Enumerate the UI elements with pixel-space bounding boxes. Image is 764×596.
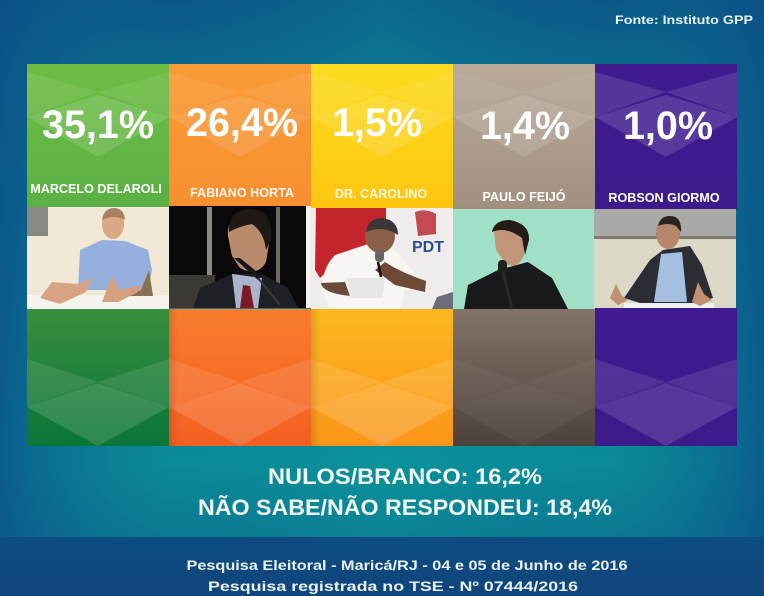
candidate name: DR. CAROLINO [335,187,427,201]
photo: Dr. Carolino [311,208,453,309]
photo: Dr. Carolino: PDT [412,239,444,256]
percentage: 1,5%: 1,5% [332,101,422,145]
panel: Paulo Feijó [453,64,595,446]
footer band [0,537,764,596]
candidate name: MARCELO DELAROLI [30,182,162,196]
percentage: 35,1%: 35,1% [42,103,154,147]
percentage: 26,4%: 26,4% [186,101,298,145]
summary: null and undecided votes: NULOS/BRANCO: 16,2% [268,464,542,489]
photo: Robson Giormo [594,209,736,308]
summary: null and undecided votes: NÃO SABE/NÃO RESPONDEU: 18,4% [198,495,612,520]
photo: Paulo Feijó [453,209,595,309]
candidate name: PAULO FEIJÓ [482,189,566,204]
percentage: 1,4%: 1,4% [480,104,570,148]
footer band: Pesquisa registrada no TSE - Nº 07444/2016 [208,578,578,594]
panel: Marcelo Delaroli [27,64,169,446]
panel: Dr. Carolino [311,64,453,446]
photo: Marcelo Delaroli [27,207,169,309]
summary: null and undecided votes [198,464,612,520]
percentage: 1,0%: 1,0% [623,104,713,148]
survey details: Pesquisa Eleitoral - Maricá/RJ - 04 e 05 de Junho de 2016 [186,557,628,573]
panel: Robson Giormo [594,64,737,446]
photo: Fabiano Horta [169,206,311,308]
candidate name: ROBSON GIORMO [608,191,720,205]
source credit: Fonte: Instituto GPP [615,13,753,27]
candidate name: FABIANO HORTA [190,186,294,200]
panel: Fabiano Horta [169,64,311,446]
